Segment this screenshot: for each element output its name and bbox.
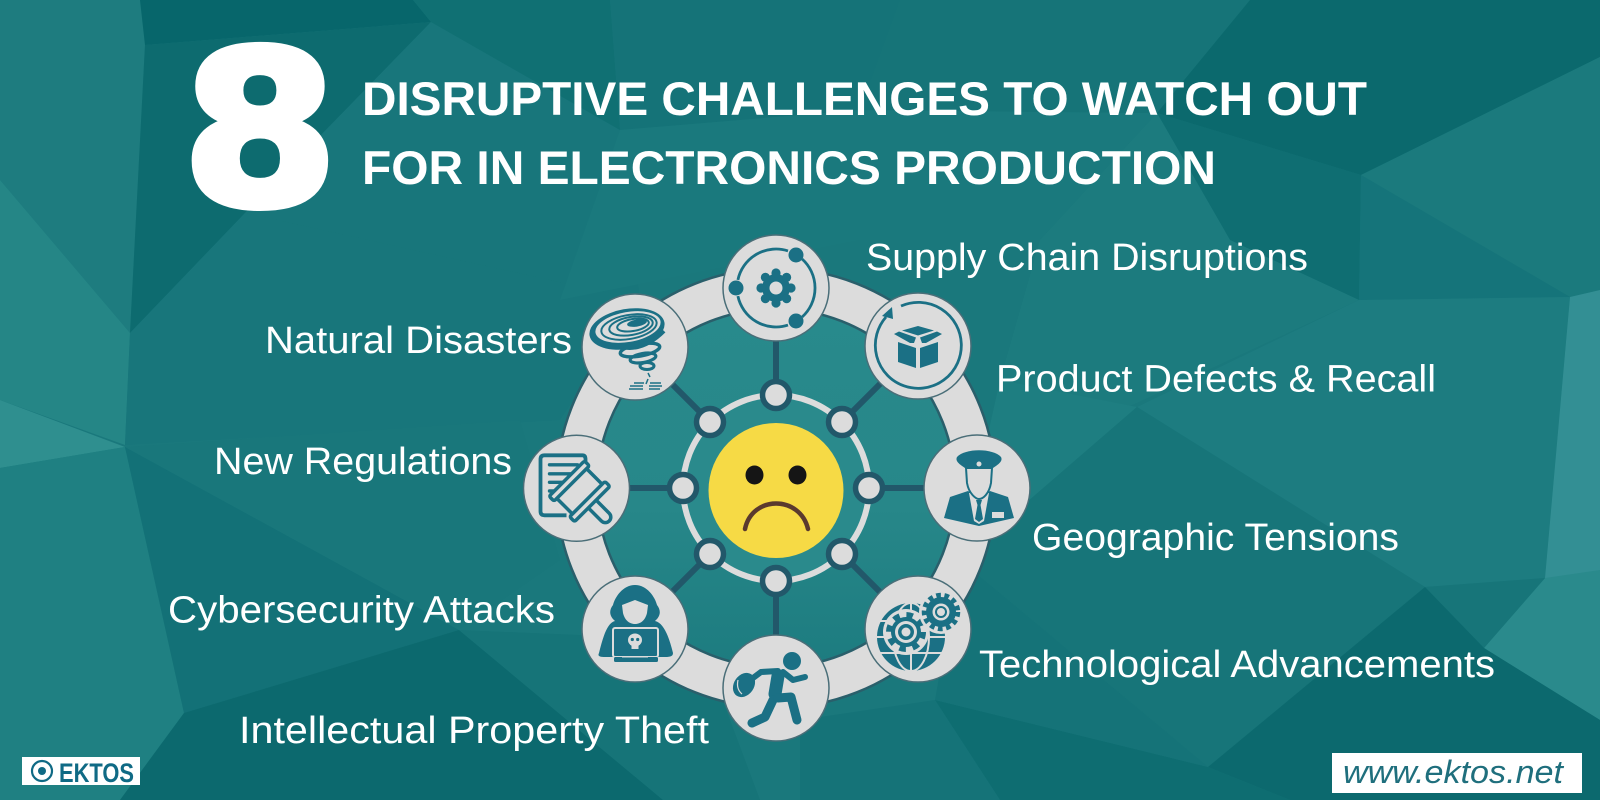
label: Product Defects & Recall: Product Defects & Recall xyxy=(996,358,1436,400)
label: Geographic Tensions: Geographic Tensions xyxy=(1032,517,1399,559)
label: Technological Advancements: Technological Advancements xyxy=(979,644,1495,686)
icon: running thief xyxy=(723,635,829,741)
logo: EKTOS: EKTOS xyxy=(59,758,134,788)
logo: EKTOS xyxy=(22,757,140,788)
title: DISRUPTIVE CHALLENGES TO WATCH OUT xyxy=(362,72,1367,125)
icon: product box with return arrow xyxy=(865,293,971,399)
hub diagram xyxy=(524,235,1030,741)
label: Cybersecurity Attacks: Cybersecurity Attacks xyxy=(168,590,555,632)
label: Supply Chain Disruptions: Supply Chain Disruptions xyxy=(866,237,1308,279)
label: Intellectual Property Theft: Intellectual Property Theft xyxy=(239,710,709,752)
icon: document and gavel xyxy=(524,435,630,541)
title xyxy=(362,72,1367,194)
label: Natural Disasters: Natural Disasters xyxy=(265,320,572,362)
inner nodes xyxy=(670,382,882,594)
inner ring xyxy=(683,395,869,581)
icon: officer xyxy=(924,435,1030,541)
icon: globe and gears xyxy=(865,576,971,682)
sad face xyxy=(708,423,844,558)
title: FOR IN ELECTRONICS PRODUCTION xyxy=(362,141,1216,194)
spokes xyxy=(576,288,976,688)
icon: supply chain gear cycle xyxy=(723,235,829,341)
icon: hacker with laptop xyxy=(582,576,688,682)
website address box: www.ektos.net xyxy=(1343,754,1564,790)
icon: tornado xyxy=(582,294,688,400)
label: New Regulations: New Regulations xyxy=(214,441,512,483)
big number 8: 8 xyxy=(182,6,338,255)
outer ring xyxy=(576,288,976,688)
